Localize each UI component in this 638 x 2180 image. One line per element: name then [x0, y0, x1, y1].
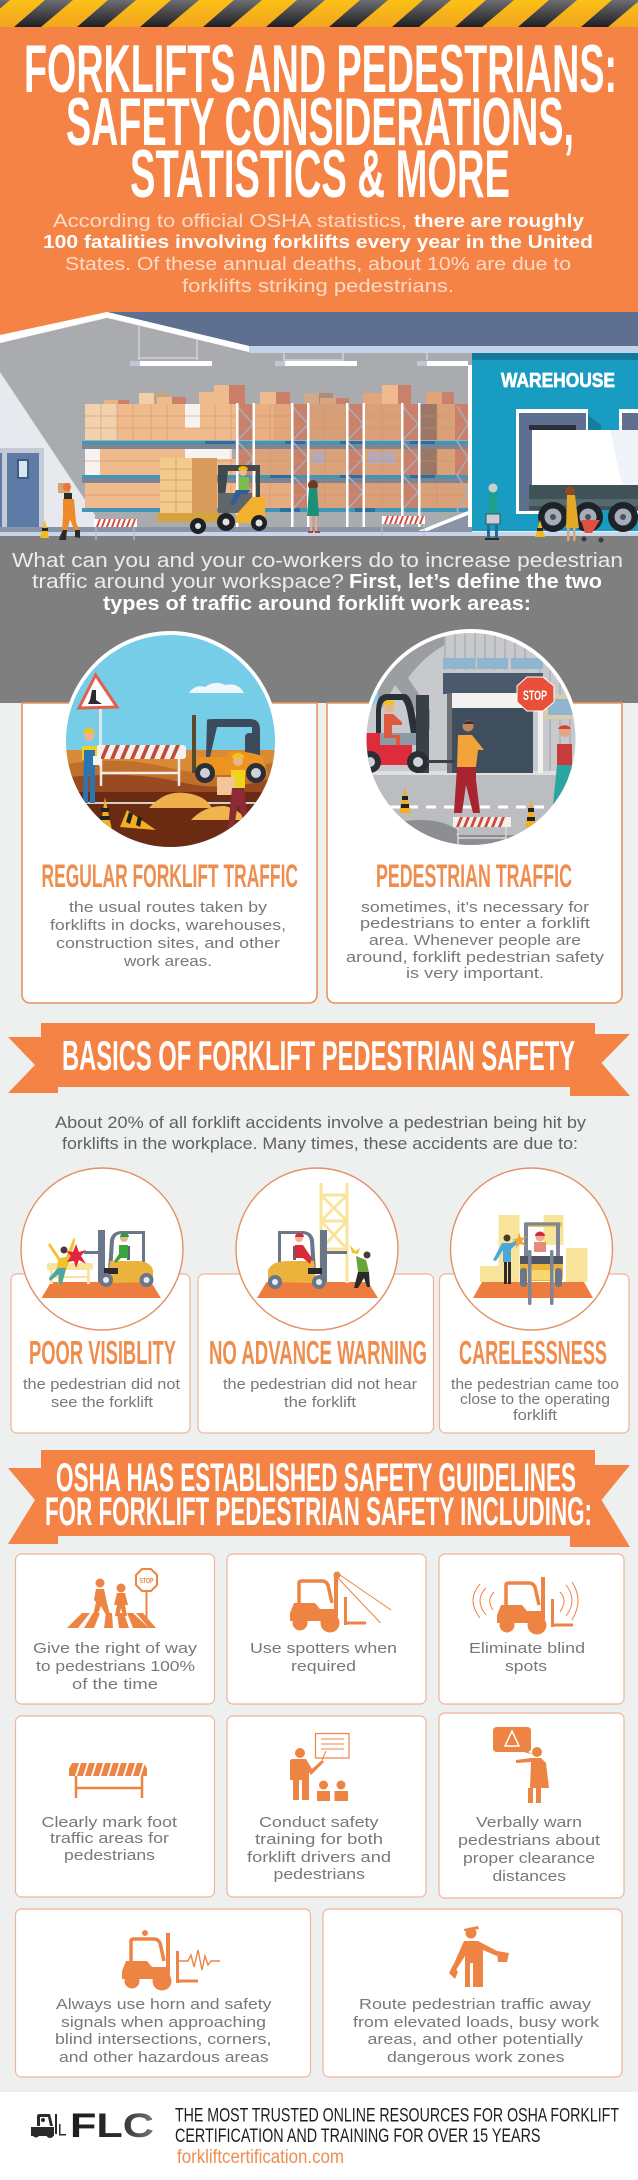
heading: REGULAR FORKLIFT TRAFFIC — [42, 858, 298, 894]
loaded forklift with driver — [157, 458, 267, 534]
cones — [100, 797, 156, 830]
panel: regular forklift traffic — [22, 630, 317, 1003]
circle illustration — [236, 1168, 398, 1330]
man with basket — [485, 484, 500, 540]
basics intro text: forklifts in the workplace. Many times, these accidents are due to: — [62, 1134, 578, 1153]
description: the usual routes taken by — [69, 899, 268, 916]
text: Clearly mark foot — [42, 1814, 178, 1831]
text: of the time — [72, 1676, 158, 1693]
description: work areas. — [123, 953, 212, 970]
basics intro text — [55, 1113, 587, 1153]
icon: forklift with sound waves — [473, 1577, 578, 1634]
text: areas, and other potentially — [368, 2031, 584, 2048]
circle illustration — [450, 1168, 612, 1330]
icon: flagger — [449, 1926, 509, 1987]
circular illustration: construction site — [60, 630, 280, 857]
blue warehouse facade — [468, 353, 638, 532]
text: dangerous work zones — [387, 2049, 564, 2066]
text — [55, 1996, 272, 2066]
card: mark foot traffic — [16, 1716, 214, 1897]
website: forkliftcertification.com — [177, 2147, 344, 2168]
text: traffic areas for — [50, 1830, 169, 1847]
blue roof and wall — [0, 311, 638, 535]
text — [458, 1814, 601, 1885]
text: proper clearance — [463, 1850, 595, 1867]
text: pedestrians — [274, 1866, 365, 1883]
description: sometimes, it’s necessary for — [361, 899, 589, 916]
text: Give the right of way — [33, 1640, 198, 1657]
text — [469, 1640, 585, 1675]
text: spots — [505, 1658, 547, 1675]
text: and other hazardous areas — [59, 2049, 269, 2066]
intro text: there are roughly — [414, 211, 584, 231]
intro text: 100 fatalities involving forklifts every year in the United — [43, 232, 593, 252]
description: see the forklift — [51, 1394, 154, 1411]
text: signals when approaching — [61, 2014, 266, 2031]
card: horn and signals — [16, 1909, 310, 2077]
card: route traffic away — [323, 1909, 622, 2077]
card: safety training — [227, 1716, 426, 1897]
worker with box — [217, 753, 248, 828]
text: training for both — [255, 1831, 383, 1848]
description — [50, 899, 286, 970]
description: construction sites, and other — [56, 935, 280, 952]
floor and road — [0, 511, 638, 703]
description: area. Whenever people are — [369, 932, 581, 949]
text — [247, 1814, 391, 1883]
stop sign: STOP — [523, 687, 547, 703]
text: distances — [492, 1868, 566, 1885]
hazard stripe band — [0, 0, 638, 27]
gray question text — [12, 550, 623, 615]
heading: POOR VISIBLITY — [29, 1334, 176, 1371]
basics intro text: About 20% of all forklift accidents involve a pedestrian being hit by — [55, 1113, 587, 1132]
text — [33, 1640, 198, 1693]
top stacks — [104, 385, 454, 405]
description: the forklift — [284, 1394, 357, 1411]
icon: pedestrians crossing and stop sign — [67, 1569, 157, 1628]
row 3 — [85, 483, 468, 508]
ribbon: OSHA guidelines heading — [8, 1450, 630, 1547]
circular illustration: loading dock — [366, 629, 576, 845]
description: forklift — [513, 1407, 558, 1424]
text: pedestrians — [64, 1847, 155, 1864]
text: Conduct safety — [259, 1814, 379, 1831]
intro text — [43, 211, 593, 296]
panel: carelessness — [440, 1168, 629, 1433]
panel: pedestrian traffic — [327, 625, 622, 1003]
card: verbal warning — [439, 1713, 624, 1898]
description: pedestrians to enter a forklift — [360, 915, 591, 932]
icon: forklift with spotlight — [290, 1572, 391, 1632]
card: right of way — [16, 1554, 214, 1704]
description: is very important. — [406, 965, 544, 982]
site forklift — [192, 715, 268, 783]
description: the pedestrian came too — [451, 1376, 619, 1393]
FLC logo: FLC — [70, 2107, 154, 2145]
barriers — [94, 516, 425, 540]
description — [346, 899, 605, 982]
orange header panel — [0, 27, 638, 338]
intro text: According to official OSHA statistics, — [53, 211, 407, 231]
cones — [399, 787, 537, 827]
circle illustration — [21, 1168, 183, 1330]
pedestrian with phone — [454, 720, 484, 813]
icon: trainer and audience — [290, 1734, 349, 1801]
card: spotters — [227, 1554, 426, 1704]
icon: barrier — [69, 1763, 147, 1798]
stacked boxes on racks — [82, 385, 468, 529]
dashed line — [390, 806, 570, 808]
text: blind intersections, corners, — [55, 2031, 272, 2048]
icon: pedestrians crossing and stop sign: STOP — [140, 1578, 154, 1585]
intro text: forklifts striking pedestrians. — [182, 276, 454, 296]
worker with clipboard — [82, 728, 101, 803]
warehouse illustration — [0, 311, 638, 703]
red forklift — [359, 694, 455, 773]
description: the pedestrian did not hear — [223, 1376, 417, 1393]
text — [250, 1640, 397, 1675]
description — [223, 1376, 417, 1411]
text: Route pedestrian traffic away — [359, 1996, 592, 2013]
FLC logo — [31, 2107, 154, 2145]
rack uprights — [236, 403, 468, 529]
front forklift — [520, 1222, 563, 1305]
heading: NO ADVANCE WARNING — [209, 1334, 427, 1371]
worker with box — [58, 483, 80, 540]
text: forklift drivers and — [247, 1849, 391, 1866]
shelf beams — [82, 441, 468, 512]
people and cones — [40, 480, 604, 542]
gray question text: First, let’s define the two — [349, 571, 602, 593]
tagline — [175, 2106, 619, 2147]
warning sign — [79, 675, 117, 766]
footer — [0, 2092, 638, 2180]
gray question text: traffic around your workspace? — [32, 571, 344, 593]
text: Verbally warn — [476, 1814, 582, 1831]
icon: woman with warning bubble — [493, 1727, 549, 1803]
barrier — [96, 745, 186, 786]
text: required — [291, 1658, 356, 1675]
text: pedestrians about — [458, 1832, 601, 1849]
description: the pedestrian did not — [23, 1376, 181, 1393]
woman with stroller — [565, 486, 604, 542]
text: to pedestrians 100% — [36, 1658, 195, 1675]
pedestrian — [493, 1232, 527, 1284]
warehouse sign: WAREHOUSE — [501, 370, 615, 392]
description — [23, 1376, 181, 1411]
card: blind spots — [439, 1554, 624, 1704]
stop sign — [517, 677, 554, 711]
text — [42, 1814, 178, 1864]
intro text: States. Of these annual deaths, about 10% are due to — [65, 254, 571, 274]
gray question text: What can you and your co-workers do to increase pedestrian — [12, 550, 623, 572]
description: forklifts in docks, warehouses, — [50, 917, 286, 934]
panel: poor visibility — [11, 1168, 190, 1433]
title — [24, 31, 617, 212]
description: close to the operating — [460, 1391, 610, 1408]
row 2 — [85, 449, 468, 475]
text: from elevated loads, busy work — [353, 2014, 600, 2031]
row 1 — [85, 404, 468, 440]
text — [353, 1996, 600, 2066]
description: around, forklift pedestrian safety — [346, 949, 605, 966]
barrier — [453, 817, 511, 845]
text: Always use horn and safety — [56, 1996, 272, 2013]
woman in green — [307, 480, 320, 533]
icon: forklift with horn signal — [122, 1930, 220, 1990]
truck — [529, 430, 638, 532]
side door — [0, 448, 44, 532]
gray question text: types of traffic around forklift work areas: — [103, 593, 531, 615]
text: Eliminate blind — [469, 1640, 585, 1657]
ribbon: basics heading — [8, 1023, 630, 1096]
text: Use spotters when — [250, 1640, 397, 1657]
panel: no advance warning — [198, 1168, 434, 1433]
sand piles — [149, 793, 212, 808]
woman with phone — [553, 725, 572, 804]
description — [451, 1376, 619, 1424]
